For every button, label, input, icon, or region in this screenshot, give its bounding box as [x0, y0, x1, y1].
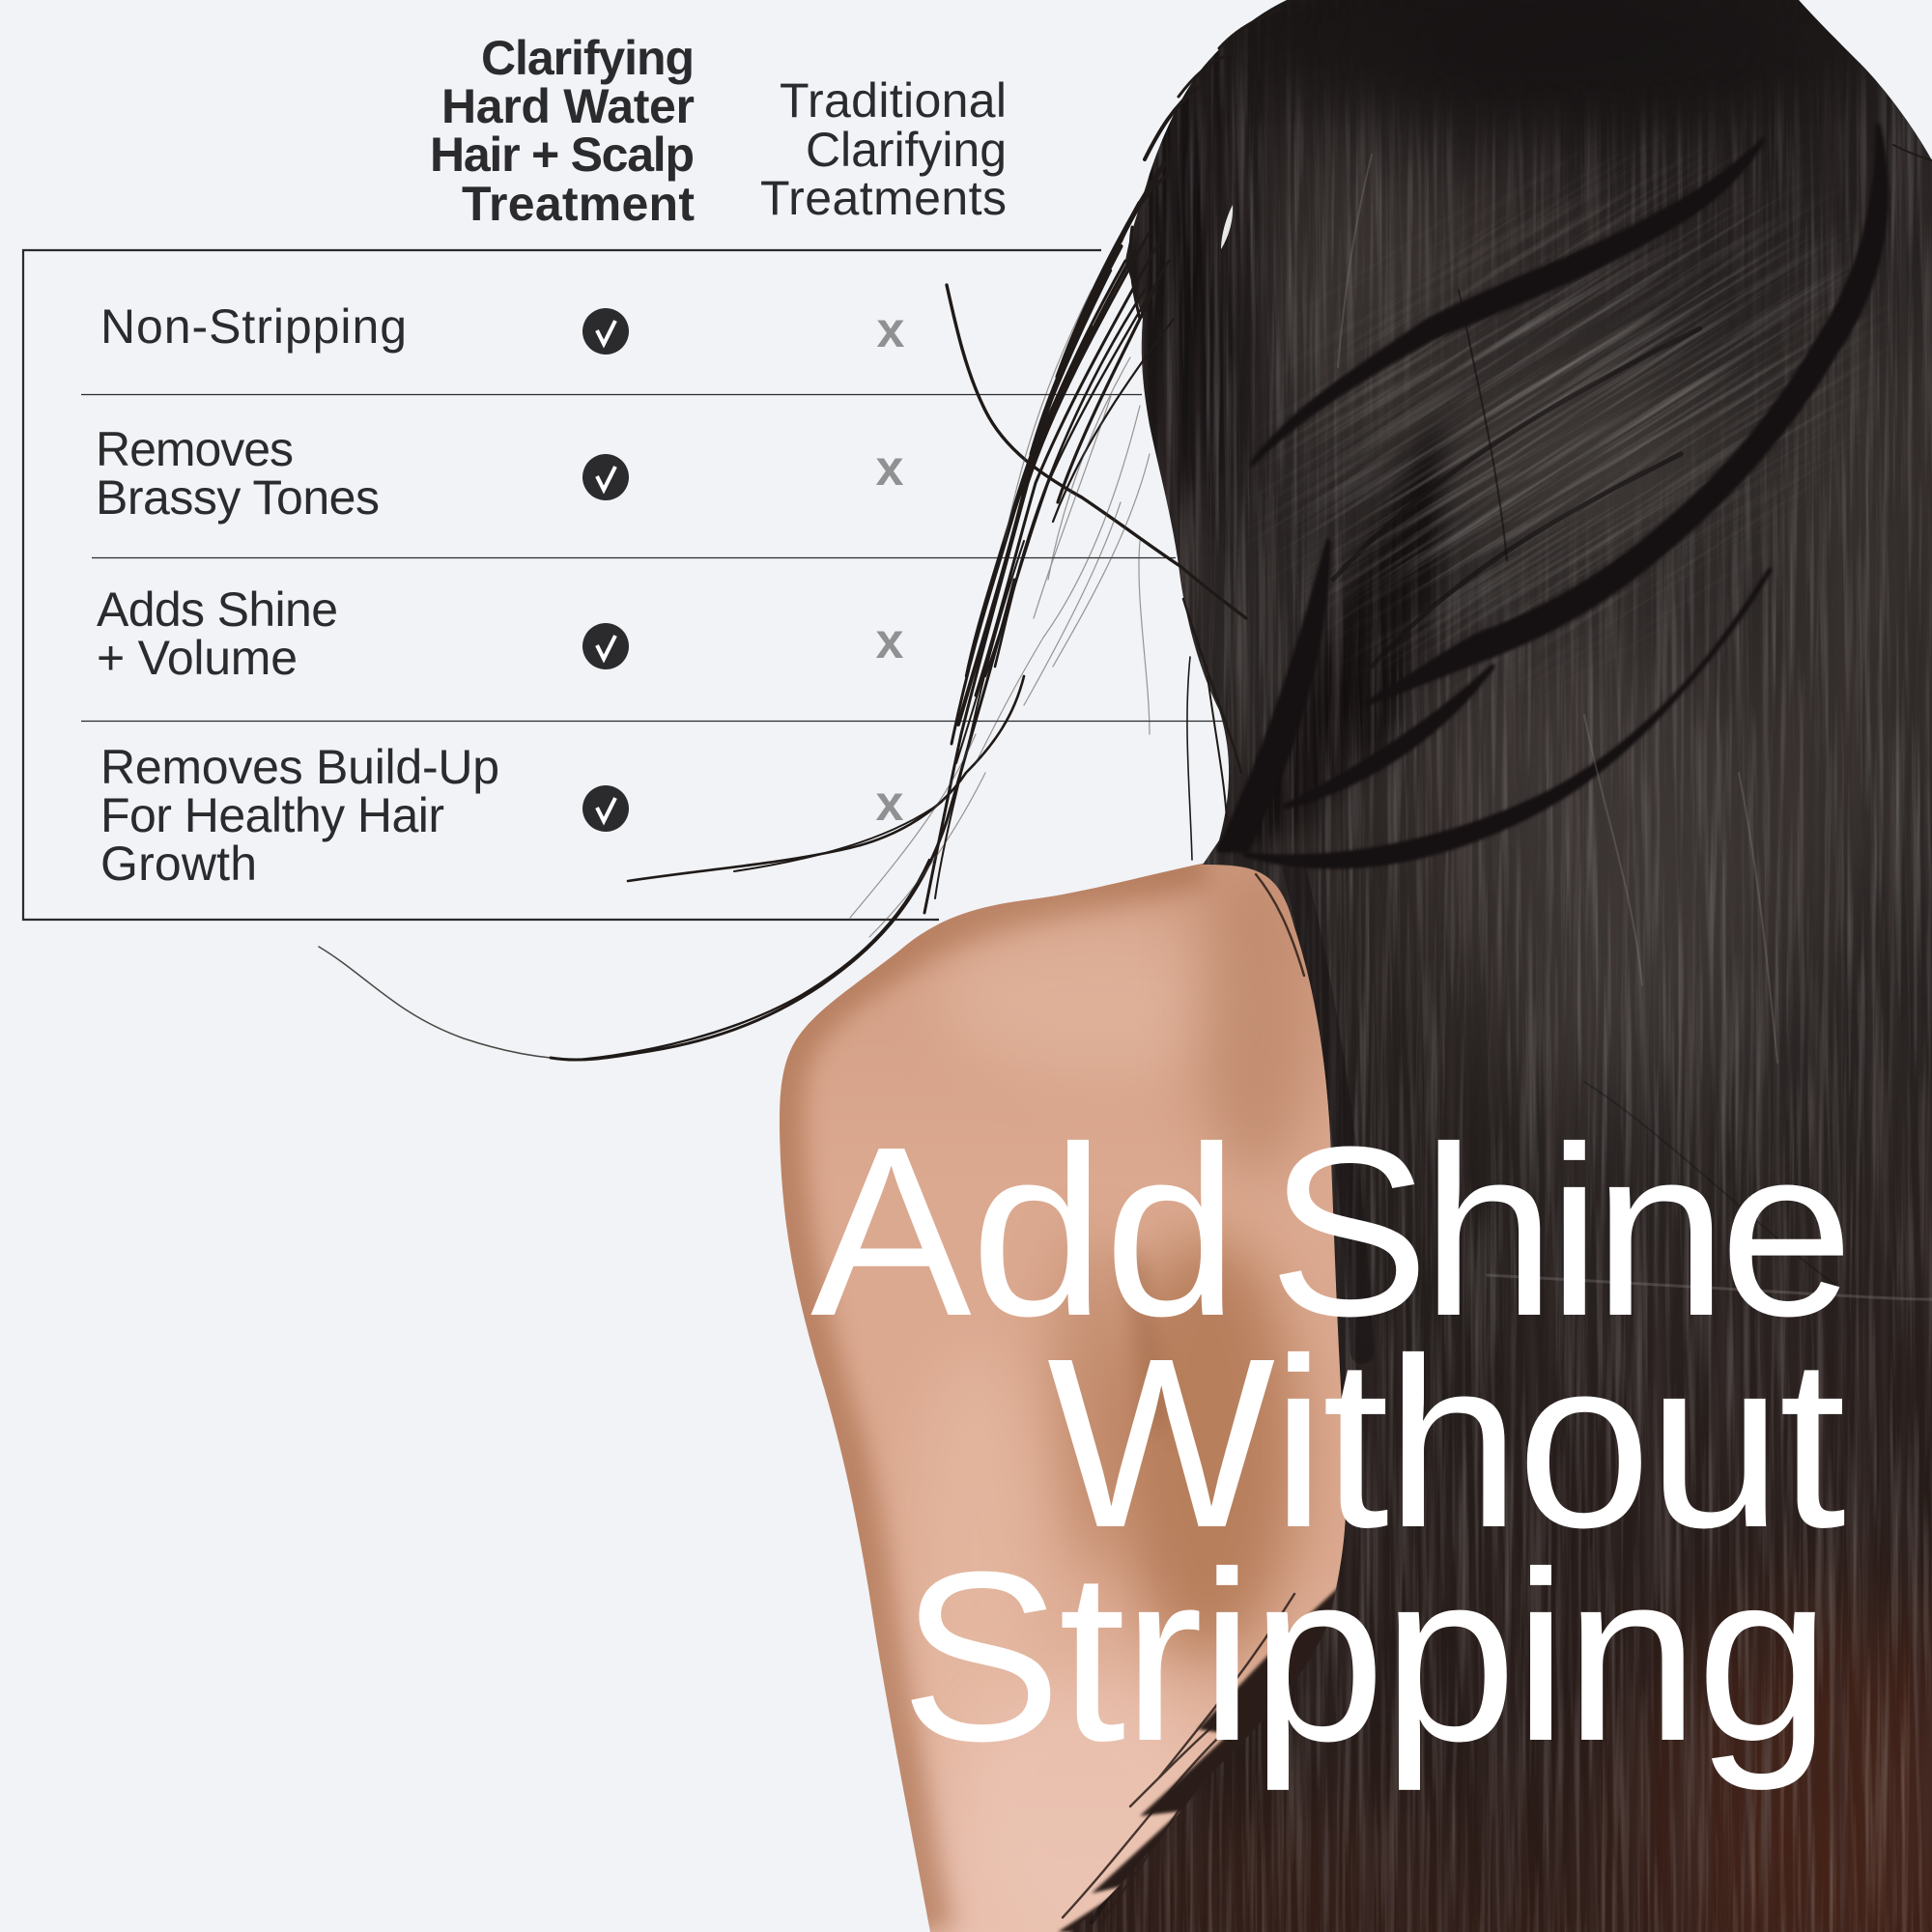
headline: Add Shine Without Stripping — [810, 1096, 1854, 1791]
hair shading — [1082, 0, 1932, 1932]
right flyaways — [1893, 145, 1932, 160]
hair strand texture: vertical — [1063, 0, 1932, 1932]
row label: Non-Stripping: Non-Stripping — [100, 299, 407, 354]
dark sweeping locks — [1219, 126, 1886, 867]
icon: x row 1: x — [877, 302, 905, 358]
row label: Removes Brassy Tones — [96, 422, 380, 525]
row label: Adds Shine + Volume: + Volume — [97, 631, 298, 685]
stray hairs over back — [1063, 874, 1304, 1922]
flyaway hair bundle — [319, 10, 1932, 1060]
lower hair fan over back — [1058, 1575, 1449, 1932]
column heading: Traditional Clarifying Treatments — [760, 73, 1007, 225]
highlight strands — [1338, 155, 1932, 1299]
icon: x row 2: x — [876, 440, 904, 497]
fine dark hair lines — [1092, 290, 1835, 1922]
row label: Removes Build-Up For Healthy Hair Growth: For Healthy Hair — [100, 788, 444, 842]
comparison table — [23, 31, 1224, 920]
row dividers — [81, 394, 1224, 721]
row label: Removes Build-Up For Healthy Hair Growth — [100, 740, 499, 891]
row label: Removes Build-Up For Healthy Hair Growth: Growth — [100, 837, 257, 891]
row label: Removes Brassy Tones: Removes — [96, 422, 294, 476]
column heading: Clarifying Hard Water Hair + Scalp Treatment: Clarifying — [481, 31, 695, 85]
row label: Adds Shine + Volume — [97, 582, 338, 685]
headline: Add Shine Without Stripping: Add — [810, 1096, 1238, 1366]
headline: Add Shine Without Stripping: Without — [1047, 1308, 1846, 1577]
icon: x row 3: x — [876, 613, 904, 669]
column heading: Traditional Clarifying Treatments: Clarifying — [806, 123, 1007, 177]
icon: x row 4: x — [876, 776, 904, 832]
headline: Add Shine Without Stripping: Stripping — [900, 1521, 1831, 1791]
column heading: Clarifying Hard Water Hair + Scalp Treatment: Hair + Scalp — [430, 128, 695, 182]
curved strand into hair — [947, 285, 1246, 618]
icon: check row 3 — [582, 623, 629, 669]
headline: Add Shine Without Stripping: Shine — [1268, 1096, 1854, 1366]
column heading: Traditional Clarifying Treatments: Treatments — [760, 171, 1007, 225]
row label: Removes Brassy Tones: Brassy Tones — [96, 470, 380, 525]
column heading: Clarifying Hard Water Hair + Scalp Treatment: Hard Water — [441, 79, 695, 133]
column heading: Traditional Clarifying Treatments: Traditional — [780, 73, 1007, 128]
bright gap in hair — [1221, 205, 1233, 249]
faint flyaway wisps — [850, 290, 1150, 937]
icon: check row 2 — [582, 454, 629, 500]
icon: check row 4 — [582, 785, 629, 832]
column heading: Clarifying Hard Water Hair + Scalp Treatment — [430, 31, 695, 231]
main hair mass — [1069, 0, 1932, 1932]
icon: check row 1 — [582, 308, 629, 355]
column heading: Clarifying Hard Water Hair + Scalp Treatment: Treatment — [462, 177, 695, 231]
bare shoulder and back — [780, 864, 1346, 1932]
long strand sweeping left — [319, 947, 551, 1058]
table outline — [23, 250, 1101, 920]
strand across row four — [628, 676, 1024, 881]
row label: Removes Build-Up For Healthy Hair Growth: Removes Build-Up — [100, 740, 499, 794]
row label: Adds Shine + Volume: Adds Shine — [97, 582, 338, 637]
hair strand texture: diagonal — [1291, 189, 1847, 646]
